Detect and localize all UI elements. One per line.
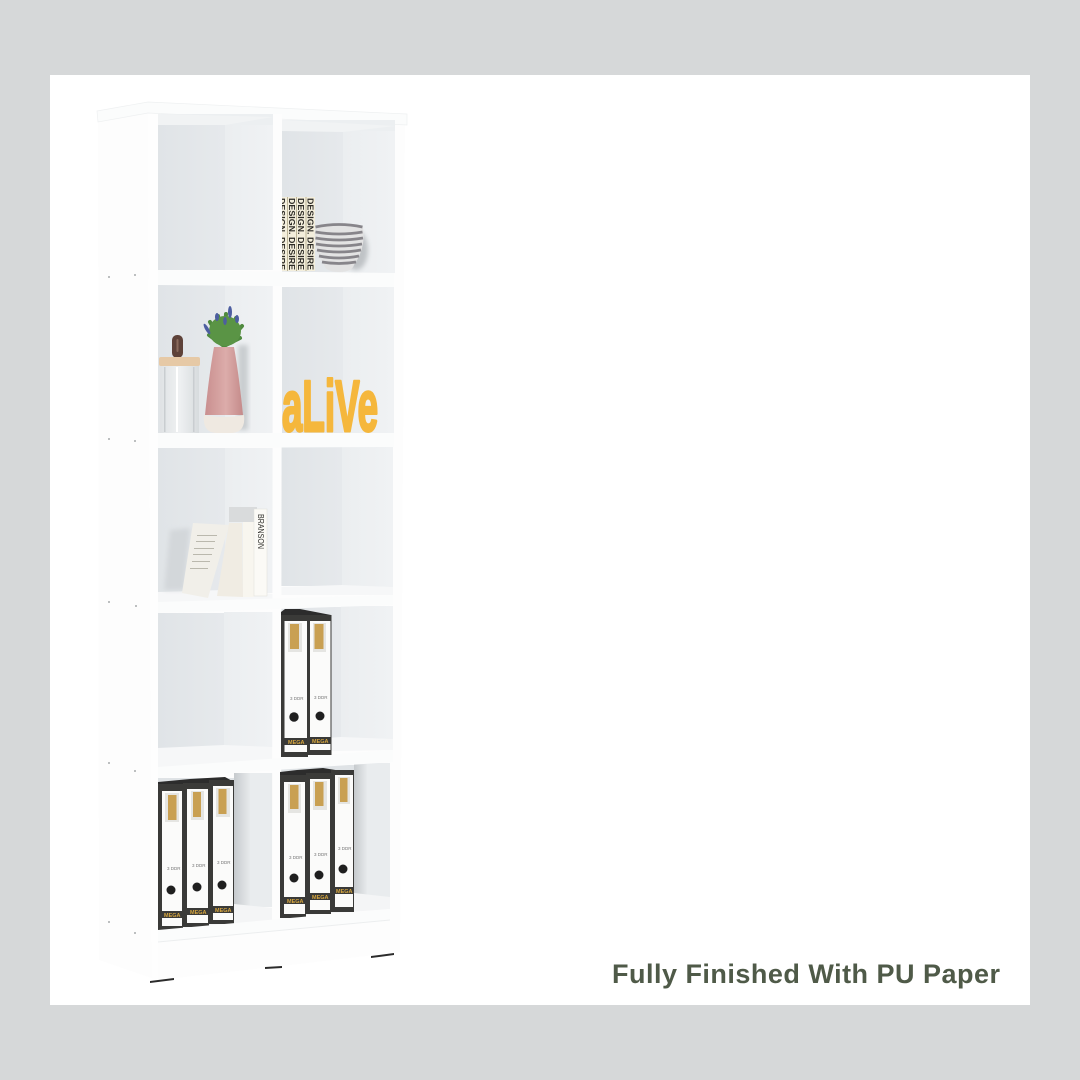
row 1 objects: design books: DESIGN. DESIRE [277,198,287,270]
binder 2: 3 DDR [314,695,328,700]
row 1 objects: design books: DESIGN. DESIRE [296,198,306,270]
binder 1: MEGA [288,740,305,746]
compartment row 1 left [158,114,273,270]
compartment row 4 left [158,612,273,767]
top board [97,102,407,125]
binder 8: 3 DDR [338,846,352,851]
row 3 objects: books: BRANSON [256,514,266,549]
binder tops row 5 right [280,768,354,782]
caption: Fully Finished With PU Paper [612,959,1000,989]
shelf boards [158,270,394,778]
binders row 5 left [158,777,234,930]
middle divider [272,114,282,923]
binder tops row 4 [281,609,331,620]
binder 6 [280,775,306,918]
binders row 5 right [280,768,354,918]
binder 4: 3 DDR [192,863,206,868]
row 2 objects: glass jar [159,335,200,433]
binder 4: MEGA [190,910,207,916]
compartment row 3 right [281,447,393,595]
row 3 objects: books [164,507,267,598]
bookshelf [97,102,407,983]
shelf carcass [98,113,405,980]
compartment row 5 right [281,763,390,917]
row 1 objects: design books [282,197,315,271]
binder 2: MEGA [312,739,329,745]
binder 5 [209,780,234,924]
binder 2 [307,615,332,755]
compartment row 2 right [282,287,394,433]
binder 7 [306,773,331,914]
row 1 objects: striped bowl [315,224,368,272]
compartment row 3 left [158,448,273,602]
row 1 objects: design books: DESIGN. DESIRE [287,198,297,270]
binder 4 [183,783,209,927]
binders row 4 [281,609,332,757]
row 1 objects: design books: DESIGN. DESIRE [306,198,316,270]
binder 6: 3 DDR [289,855,303,860]
side panel holes [108,274,137,934]
binder 1 [281,615,308,757]
binder 3: 3 DDR [167,866,181,871]
binder 5: MEGA [215,908,232,914]
white panel [50,75,1030,1005]
binder 3 [158,784,183,930]
binder 8 [331,770,354,912]
binder 5: 3 DDR [217,860,231,865]
binder 1: 3 DDR [290,696,304,701]
compartment row 2 left [158,285,273,433]
row 2 objects: pink vase with lavender [202,306,248,433]
compartment row 4 right [281,606,393,752]
binder 8: MEGA [336,889,353,895]
binder 3: MEGA [164,913,181,919]
feet [150,953,394,983]
binder 7: 3 DDR [314,852,328,857]
binder tops row 5 left [158,777,234,792]
compartment row 1 right [282,120,395,273]
row 2 objects: yellow alive letters: aLiVe [282,367,378,447]
binder 6: MEGA [287,899,304,905]
binder 7: MEGA [312,895,329,901]
bottom board and plinth [158,909,390,980]
compartment row 5 left [158,773,273,930]
